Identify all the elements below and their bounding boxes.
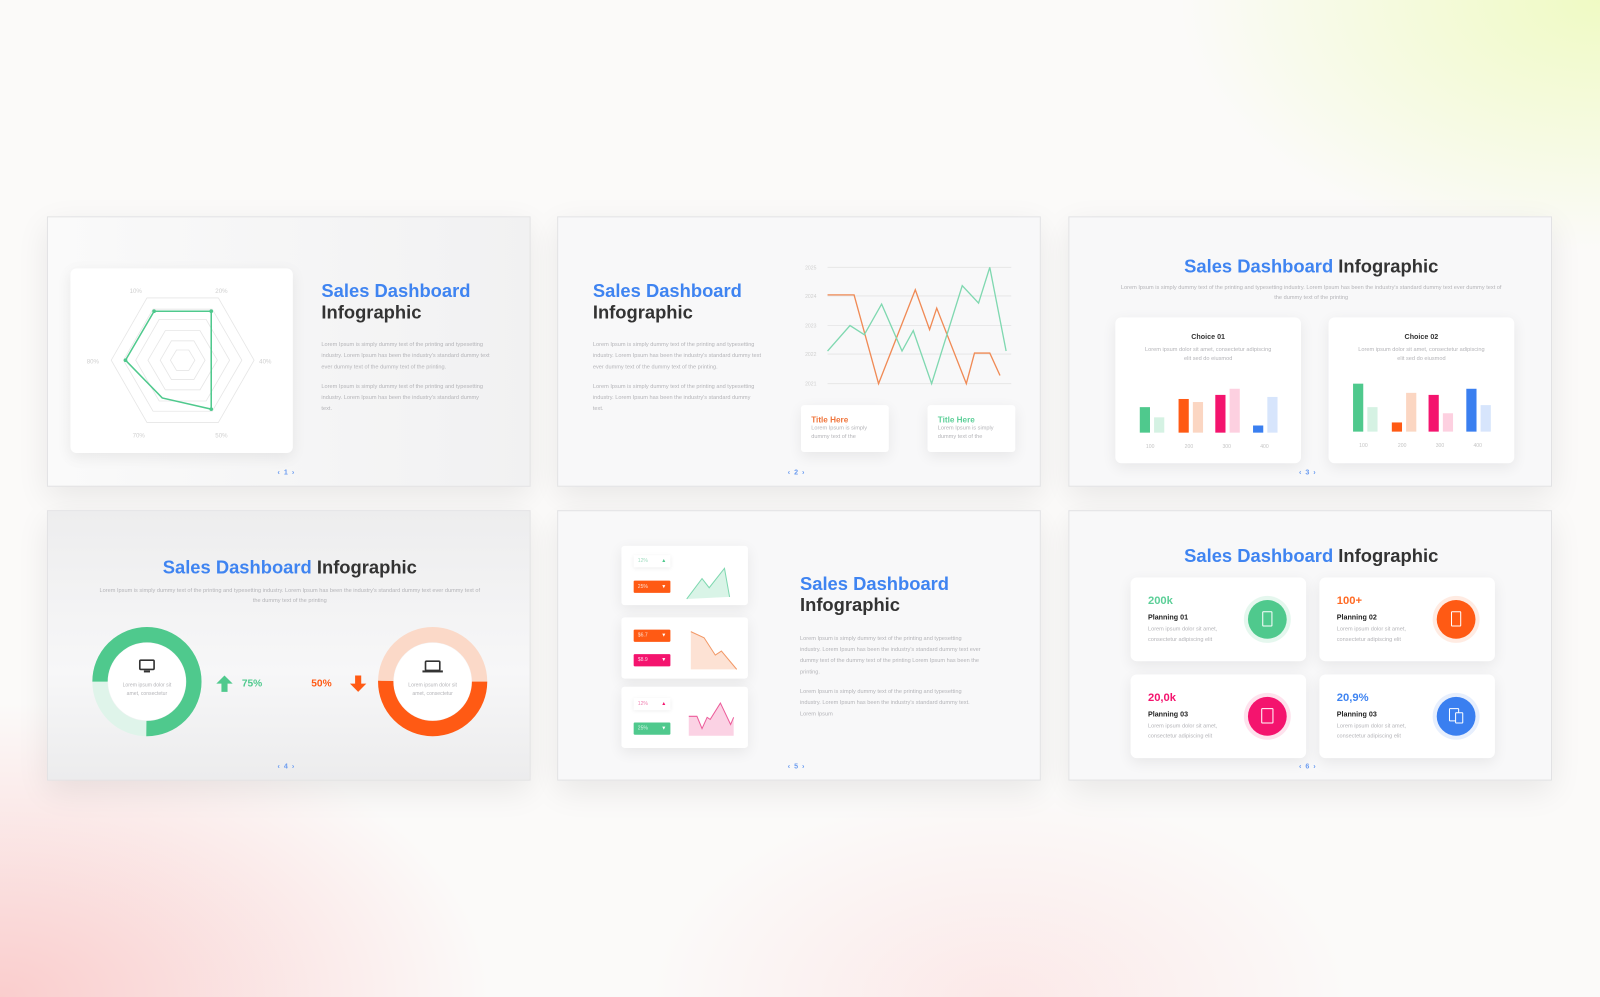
title: Sales Dashboard [800, 573, 949, 594]
body text: Lorem Ipsum is simply dummy text of the printing and typesetting industry. Lorem Ipsum has been the industry's standard dummy text. [321, 384, 483, 412]
bar chart: 100 [1146, 444, 1155, 450]
line chart: 2024 [805, 294, 817, 300]
card: sparkline 3: ▼ [661, 726, 666, 732]
line chart [805, 265, 1012, 388]
icon: green circle [1248, 600, 1287, 639]
radar chart card: 20% [215, 288, 228, 295]
card: planning 03 pink: 20,0k [1148, 692, 1176, 704]
donut: green 75%: Lorem ipsum dolor sit [123, 683, 172, 689]
arrow down + 50% [311, 676, 366, 692]
title: Sales Dashboard Infographic [1184, 256, 1438, 277]
radar chart card: 10% [130, 288, 142, 295]
card: planning 03 blue: Lorem ipsum dolor sit amet, consectetur adipiscing elit [1337, 723, 1406, 740]
callout: title here orange: Title Here [811, 415, 848, 424]
body text: Lorem Ipsum is simply dummy text of the printing and typesetting industry. Lorem Ipsum has been the industry's standard dummy text ever dummy text of the dummy text of the printing Lorem Ipsum has been the printing. [800, 636, 981, 676]
card: sparkline 1: 12% [638, 558, 648, 564]
arrow up + 75% [216, 676, 262, 692]
card: sparkline 1: ▼ [661, 584, 666, 590]
page number: ‹ 6 › [1299, 763, 1316, 770]
card: planning 03 blue: 20,9% [1337, 692, 1369, 704]
card: choice 02: Choice 02 [1405, 334, 1438, 341]
card: planning 02: Lorem ipsum dolor sit amet, consectetur adipiscing elit [1337, 627, 1406, 643]
panel: slide 1 radar [47, 216, 531, 487]
card: choice 01: Choice 01 [1191, 334, 1225, 341]
panel: slide 2 line chart [557, 216, 1041, 487]
card: sparkline 3: 25% [638, 726, 648, 732]
radar chart card: 80% [87, 358, 100, 365]
card: choice 01 [1115, 317, 1301, 463]
body text [593, 342, 761, 412]
radar chart card: 70% [133, 433, 145, 440]
card: planning 02 [1319, 578, 1495, 661]
card: planning 02: Planning 02 [1337, 614, 1377, 621]
line chart: 2021 [805, 382, 817, 388]
bar chart: 400 [1260, 444, 1269, 450]
card: planning 01: 200k [1148, 595, 1173, 607]
card: sparkline 1 [621, 546, 748, 605]
title: Infographic [321, 302, 421, 322]
body text: Lorem Ipsum is simply dummy text of the printing and typesetting industry. Lorem Ipsum has been the industry's standard dummy text ever dummy text of the dummy text of the printing. [593, 342, 761, 370]
page number: ‹ 2 › [788, 469, 804, 477]
icon: orange circle [1437, 600, 1475, 639]
title: Sales Dashboard Infographic [163, 557, 417, 578]
bar chart: 200 [1398, 443, 1407, 449]
subtitle: Lorem Ipsum is simply dummy text of the printing and typesetting industry. Lorem Ipsum has been the industry's standard dummy text ever dummy text of the dummy text of the printing [99, 588, 480, 604]
card: planning 01: Lorem ipsum dolor sit amet, consectetur adipiscing elit [1148, 627, 1217, 643]
card: sparkline 2: $8.9 [638, 657, 648, 663]
body text: Lorem Ipsum is simply dummy text of the printing and typesetting industry. Lorem Ipsum has been the industry's standard dummy text. [593, 384, 754, 412]
callout: title here green: Lorem Ipsum is simply dummy text of the [938, 426, 994, 440]
subtitle: Lorem Ipsum is simply dummy text of the printing and typesetting industry. Lorem Ipsum has been the industry's standard dummy text ever dummy text of the dummy text of the printing [1121, 285, 1502, 301]
bar chart: 200 [1185, 444, 1193, 450]
bar chart [1353, 384, 1491, 449]
radar chart card: 40% [259, 358, 272, 365]
donut: orange 50%: Lorem ipsum dolor sit [408, 683, 458, 689]
callout: title here orange: Lorem Ipsum is simply dummy text of the [811, 426, 867, 440]
donut: orange 50%: amet, consectetur [412, 691, 453, 697]
bar chart [1140, 388, 1278, 450]
line chart: 2022 [805, 352, 817, 358]
card: planning 03 pink [1131, 674, 1306, 758]
panel: slide 6 kpi cards [1068, 510, 1552, 781]
title: Infographic [593, 302, 693, 322]
card: sparkline 3 [621, 687, 748, 748]
line chart: 2025 [805, 265, 817, 271]
radar chart card [70, 268, 293, 453]
bar chart: 400 [1473, 443, 1482, 449]
arrow down + 50%: 50% [311, 679, 332, 690]
donut: green 75%: amet, consectetur [127, 691, 167, 697]
card: choice 02 [1329, 317, 1514, 463]
donut: orange 50% [378, 627, 488, 736]
page number: ‹ 3 › [1299, 469, 1316, 477]
page number: ‹ 4 › [278, 763, 294, 770]
card: sparkline 3: 12% [638, 701, 648, 707]
card: sparkline 2 [621, 617, 748, 679]
card: sparkline 3: ▲ [661, 701, 666, 707]
title: Infographic [800, 595, 900, 615]
callout: title here orange [801, 405, 889, 452]
radar chart card: 50% [215, 433, 228, 440]
callout: title here green: Title Here [938, 415, 975, 424]
card: planning 02: 100+ [1337, 595, 1362, 607]
card: planning 03 blue: Planning 03 [1337, 711, 1377, 718]
bar chart: 100 [1359, 443, 1368, 449]
body text [321, 342, 490, 412]
card: planning 03 blue [1319, 674, 1495, 758]
title: Sales Dashboard [593, 281, 742, 301]
callout: title here green [928, 405, 1015, 452]
body text: Lorem Ipsum is simply dummy text of the printing and typesetting industry. Lorem Ipsum has been the industry's standard dummy text ever dummy text of the dummy text of the printing. [321, 342, 490, 370]
card: sparkline 1: 25% [638, 584, 648, 590]
card: choice 01: Lorem ipsum dolor sit amet, consectetur adipiscing elit sed do eiusmod [1145, 347, 1271, 362]
page number: ‹ 1 › [278, 469, 294, 477]
icon: blue circle [1437, 697, 1475, 736]
card: sparkline 2: $6.7 [638, 633, 648, 639]
title: Sales Dashboard Infographic [1184, 546, 1438, 566]
body text: Lorem Ipsum is simply dummy text of the printing and typesetting industry. Lorem Ipsum has been the industry's standard dummy text. Lorem Ipsum [800, 689, 970, 717]
panel: slide 3 bar charts [1068, 216, 1552, 487]
card: planning 03 pink: Planning 03 [1148, 711, 1188, 718]
body text [800, 636, 981, 717]
title [800, 573, 949, 615]
title [321, 281, 470, 322]
page number: ‹ 5 › [788, 763, 804, 770]
icon: pink circle [1248, 697, 1287, 736]
card: planning 01 [1131, 578, 1306, 661]
panel: slide 5 kpi sparklines [557, 510, 1041, 781]
card: choice 02: Lorem ipsum dolor sit amet, consectetur adipiscing elit sed do eiusmod [1358, 347, 1485, 362]
arrow up + 75%: 75% [242, 679, 262, 690]
card: sparkline 2: ▼ [661, 633, 666, 639]
donut: green 75% [92, 627, 202, 736]
bar chart: 300 [1436, 443, 1444, 449]
card: planning 03 pink: Lorem ipsum dolor sit amet, consectetur adipiscing elit [1148, 723, 1217, 740]
panel: slide 4 donuts [47, 510, 531, 781]
line chart: 2023 [805, 324, 817, 330]
card: sparkline 2: ▼ [661, 657, 666, 663]
card: sparkline 1: ▲ [661, 558, 666, 564]
title: Sales Dashboard [321, 281, 470, 301]
card: planning 01: Planning 01 [1148, 614, 1188, 621]
bar chart: 300 [1222, 444, 1231, 450]
title [593, 281, 742, 322]
